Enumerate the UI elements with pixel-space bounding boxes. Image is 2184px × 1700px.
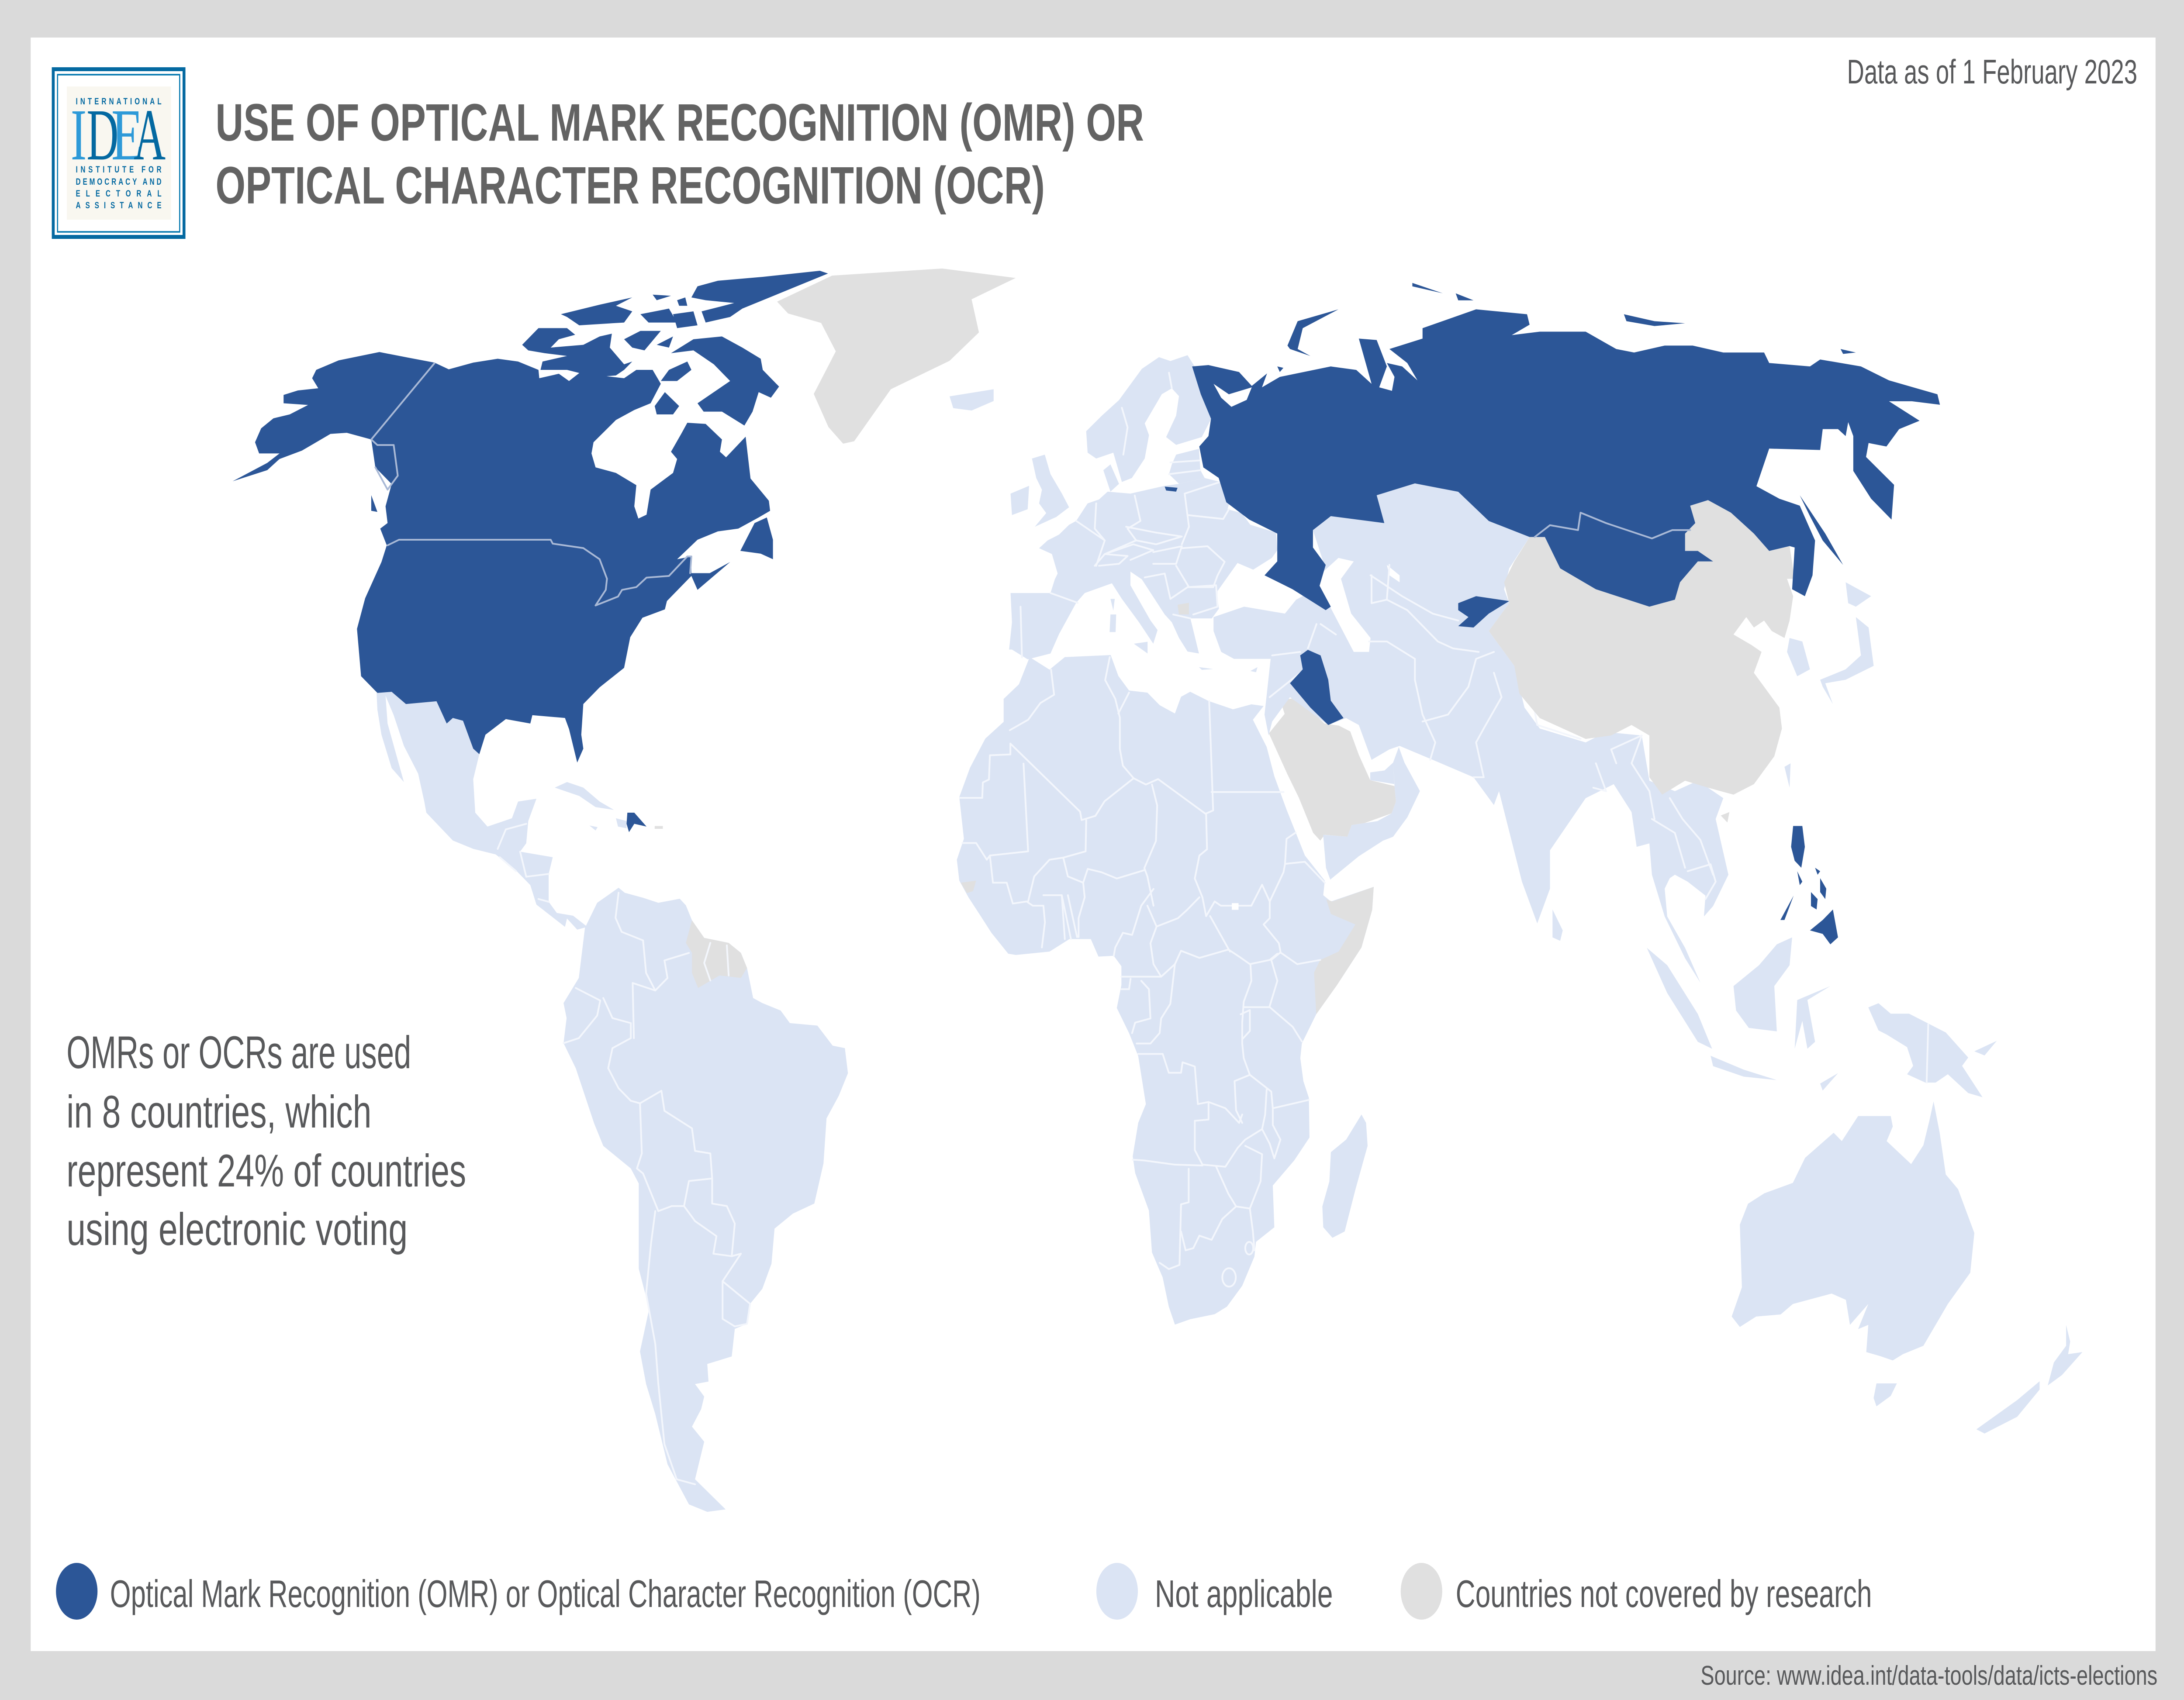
map: North America [204,271,828,930]
lake in South Sudan [1232,903,1238,910]
title: OPTICAL CHARACTER RECOGNITION (OCR) [215,156,1045,215]
legend item: not applicable [1096,1563,1333,1620]
map: Oceania [1732,1003,2082,1434]
Iraq [1290,650,1344,725]
logo: International IDEA: D [86,94,119,176]
legend item: not applicable: Not applicable [1155,1572,1333,1615]
callout: summary text: using electronic voting [66,1204,408,1255]
Asia borders [1270,565,1716,899]
logo: International IDEA: INTERNATIONAL [76,96,162,107]
Newfoundland, Vancouver Island [371,495,773,559]
Greenland [777,269,1016,444]
legend item: OMR or OCR: Optical Mark Recognition (OMR) or Optical Character Recognition (OCR) [110,1572,981,1615]
Middle East, Central, South and Southeast Asia [1213,483,1728,983]
Guinea-Bissau [961,881,976,893]
Dominican Republic [626,813,646,832]
Yemen, Oman and UAE [1323,747,1420,879]
Tasmania and New Zealand [1873,1325,2082,1434]
map: Asia [1192,283,1940,1090]
New Guinea and New Britain [1868,1003,1997,1097]
Mexico and Central America [377,692,587,930]
Saudi Arabia [1269,698,1396,841]
White Sea [1213,384,1252,407]
British Isles and Mediterranean islands [1011,455,1258,672]
source note: Source: www.idea.int/data-tools/data/icts-elections [1700,1660,2157,1691]
Africa borders [960,657,1325,1286]
callout: summary text: in 8 countries, which [66,1086,372,1138]
border: USA and Canada [371,363,691,606]
Arctic islands [522,271,828,426]
Somalia [1314,887,1374,1014]
callout: summary text: OMRs or OCRs are used [66,1027,411,1078]
China [1489,500,1795,795]
Madagascar [1322,1114,1368,1238]
Australia [1732,1101,1974,1360]
East Asian islands and Korea [1552,582,1874,941]
logo: International IDEA: ELECTORAL [76,188,162,199]
Guianas [686,921,747,988]
Aral Sea [1387,565,1400,582]
Kaliningrad [1165,486,1178,492]
data date note: Data as of 1 February 2023 [1847,53,2137,91]
Russia and Mongolia [1192,309,1940,610]
logo: International IDEA: E [111,94,143,176]
Scandinavia and Baltics [1086,355,1212,492]
legend item: not covered: Countries not covered by research [1456,1572,1872,1615]
logo: International IDEA [53,69,184,237]
map: South America [563,888,848,1512]
callout: summary text [66,1027,466,1255]
title [215,93,1144,215]
border: Russia and Mongolia [1534,513,1690,538]
legend [56,1563,1872,1620]
Europe borders [1020,373,1229,657]
map: Europe and Arabian Peninsula [1009,355,1420,879]
logo: International IDEA: I [71,94,86,176]
Iceland [950,389,994,410]
Caribbean islands [555,782,626,831]
map: Africa [957,655,1374,1324]
world map [204,269,2082,1512]
logo: International IDEA: DEMOCRACY AND [76,176,162,187]
logo: International IDEA: A [134,94,166,176]
legend item: OMR or OCR [56,1563,981,1620]
USA and Canada mainland [204,352,770,762]
Hainan [1721,812,1729,822]
Kyrgyzstan [1458,596,1509,628]
mainland Europe [1009,478,1278,659]
callout: summary text: represent 24% of countries [66,1145,466,1197]
Russia arctic islands and Sakhalin [1277,283,1856,565]
legend item: not covered [1401,1563,1872,1620]
Indonesia and Malaysia [1647,938,1838,1090]
title: USE OF OPTICAL MARK RECOGNITION (OMR) OR [215,93,1144,152]
Kosovo [1178,603,1189,614]
South America borders [563,893,750,1484]
Philippines [1780,826,1838,945]
Caspian Sea [1320,558,1371,652]
Central America borders [498,824,549,902]
logo: International IDEA: ASSISTANCE [76,200,162,210]
logo: International IDEA: INSTITUTE FOR [76,164,162,175]
map: Greenland, Iceland [777,269,1016,444]
